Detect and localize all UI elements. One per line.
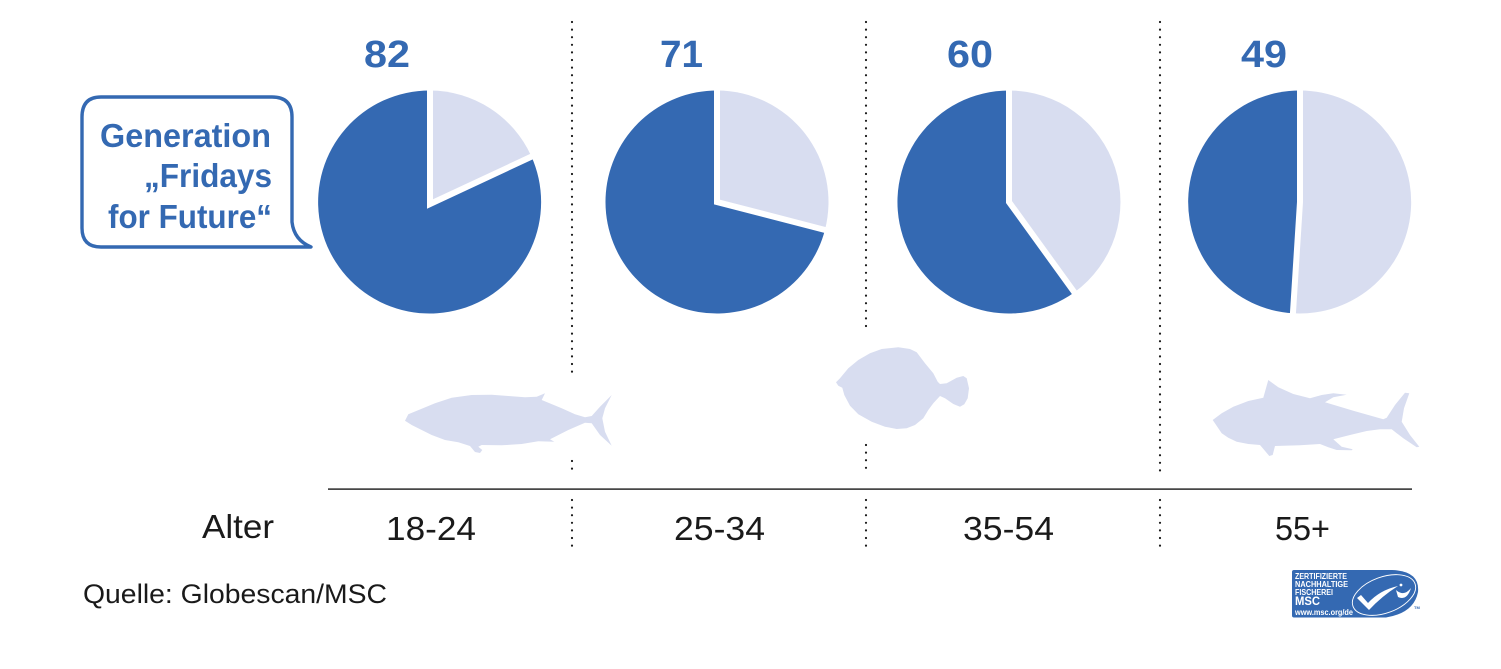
value: 60: 60 <box>947 34 993 76</box>
logo: MSC <box>1292 567 1421 623</box>
logo: MSC: www.msc.org/de <box>1294 608 1353 617</box>
logo: MSC: FISCHEREI <box>1295 588 1333 597</box>
value: 49: 49 <box>1241 34 1287 76</box>
age label: 35-54: 35-54 <box>963 510 1054 547</box>
logo: MSC: TM <box>1414 605 1420 610</box>
logo: MSC: ZERTIFIZIERTE <box>1295 572 1348 581</box>
pie chart: 18-24 <box>318 88 541 313</box>
pie chart: 25-34 <box>605 88 829 314</box>
icon: tuna <box>1213 380 1419 456</box>
source note: Quelle: Globescan/MSC <box>83 579 387 609</box>
axis title: Alter: Alter <box>202 508 274 545</box>
age label: 25-34: 25-34 <box>674 510 765 547</box>
icon: mackerel fish <box>405 393 612 453</box>
callout: Generation Fridays for Future <box>82 97 311 247</box>
icon: flatfish <box>836 347 969 429</box>
pie chart: 35-54 <box>897 88 1120 313</box>
callout: Generation Fridays for Future: „Fridays <box>144 157 272 194</box>
value: 71: 71 <box>660 34 703 76</box>
callout: Generation Fridays for Future: for Future“ <box>108 198 272 235</box>
value: 82: 82 <box>364 34 410 76</box>
age label: 55+: 55+ <box>1275 510 1330 547</box>
callout: Generation Fridays for Future: Generation <box>100 117 271 154</box>
axis line <box>328 488 1412 490</box>
logo: MSC: NACHHALTIGE <box>1295 580 1349 589</box>
age label: 18-24: 18-24 <box>386 510 476 547</box>
pie chart: 55+ <box>1188 88 1411 317</box>
logo: MSC: MSC <box>1295 594 1320 608</box>
